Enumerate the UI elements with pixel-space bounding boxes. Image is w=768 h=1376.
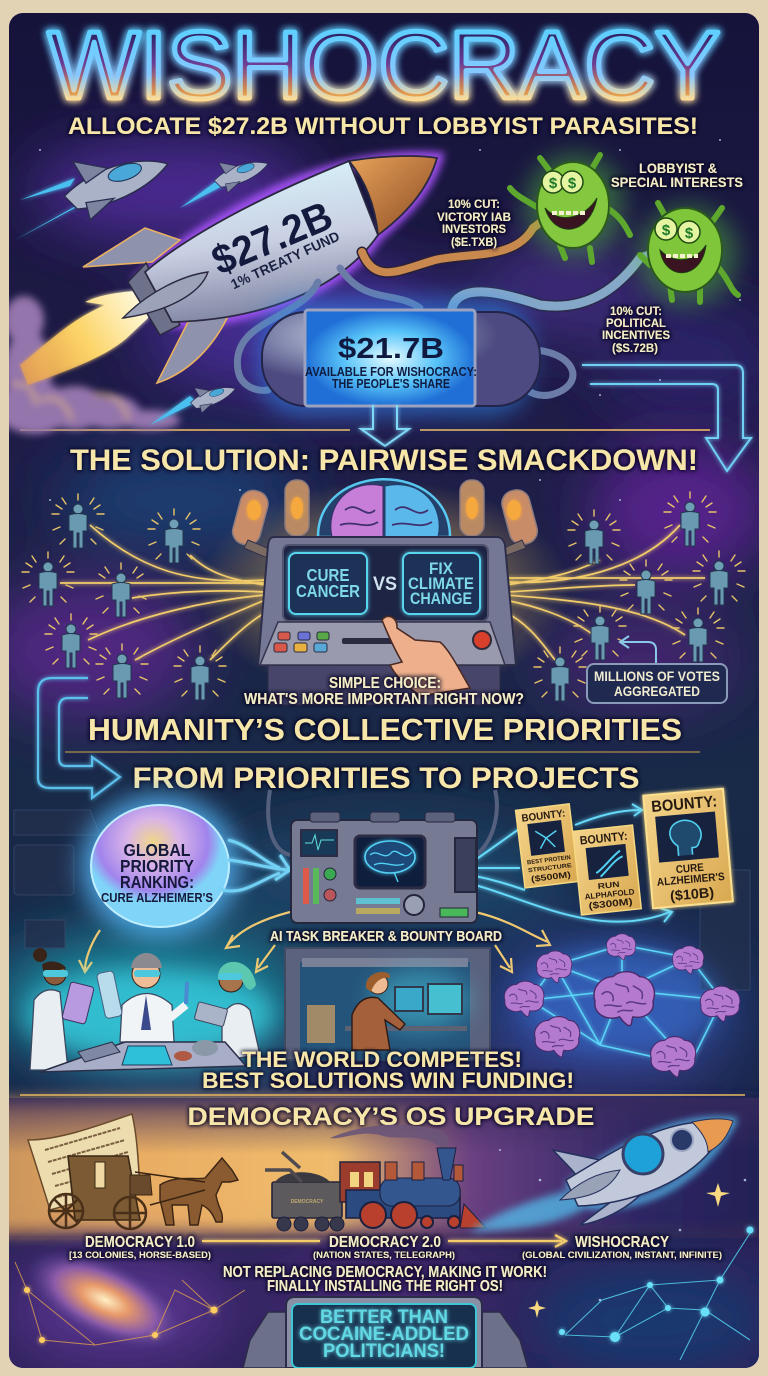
terminal text: BETTER THAN bbox=[320, 1307, 448, 1328]
carriage and scroll bbox=[28, 1114, 238, 1229]
sphere text: RANKING: bbox=[120, 872, 194, 892]
callout: millions of votes bbox=[587, 636, 727, 703]
arrow: down from tank bbox=[361, 405, 409, 446]
eyes bbox=[655, 218, 677, 240]
person at desk bbox=[352, 972, 405, 1050]
ship trails bbox=[15, 175, 230, 425]
label: lobbyist: LOBBYIST & bbox=[639, 160, 717, 176]
dividers bbox=[20, 430, 745, 1095]
AI task machine bbox=[268, 790, 497, 923]
background machinery bbox=[14, 810, 750, 990]
bounty poster: cure alzheimer's: ALZHEIMER'S bbox=[656, 871, 725, 889]
heading: OS upgrade: DEMOCRACY’S OS UPGRADE bbox=[188, 1103, 594, 1131]
label: victory lab cut: 10% CUT: bbox=[448, 199, 500, 211]
flame bbox=[20, 290, 150, 385]
feed pipes bbox=[237, 268, 420, 390]
coder workspace bbox=[285, 948, 490, 1060]
tank label line 2: THE PEOPLE'S SHARE bbox=[332, 377, 450, 391]
return pipe bbox=[515, 350, 573, 395]
caption: simple choice bbox=[244, 675, 524, 708]
heading: solution: THE SOLUTION: PAIRWISE SMACKDOWN! bbox=[70, 444, 698, 477]
label: lobbyist bbox=[611, 160, 743, 190]
steam train bbox=[265, 1125, 486, 1231]
scientist right bbox=[194, 962, 260, 1060]
scientists and lab bbox=[25, 948, 275, 1072]
versus: VS bbox=[373, 574, 397, 595]
heading: collective priorities: HUMANITY’S COLLECTIVE PRIORITIES bbox=[88, 712, 682, 747]
galaxy bbox=[12, 1230, 245, 1370]
panel: fix climate change: CLIMATE bbox=[408, 575, 474, 593]
wishocracy bbox=[522, 1234, 722, 1261]
interior glow bbox=[370, 970, 470, 1030]
machine base bbox=[268, 665, 500, 705]
cab bbox=[340, 1162, 380, 1202]
democracy 1.0: DEMOCRACY 1.0 bbox=[85, 1234, 195, 1251]
tank label: AVAILABLE FOR WISHOCRACY: bbox=[305, 365, 477, 379]
timeline arrow bbox=[202, 1235, 566, 1247]
body bbox=[648, 208, 722, 292]
wishocracy: (GLOBAL CIVILIZATION, INSTANT, INFINITE) bbox=[522, 1250, 722, 1261]
scroll writing bbox=[45, 1128, 130, 1197]
sphere text: PRIORITY bbox=[120, 856, 194, 876]
terminal text: COCAINE-ADDLED bbox=[299, 1324, 469, 1345]
eyes bbox=[542, 171, 564, 193]
sky shading bbox=[0, 1098, 768, 1238]
slider bbox=[342, 638, 404, 644]
voting machine bbox=[230, 479, 540, 705]
callout: millions of votes: AGGREGATED bbox=[614, 684, 700, 699]
boxes bbox=[307, 1005, 335, 1043]
label: political cut: ($S.72B) bbox=[612, 343, 658, 355]
fins bbox=[553, 1150, 640, 1225]
tank glow bbox=[260, 300, 530, 415]
blue constellation bbox=[528, 1183, 754, 1360]
vote lines bbox=[60, 480, 705, 700]
democracy 2.0: (NATION STATES, TELEGRAPH) bbox=[313, 1250, 455, 1261]
glowing vote lines bbox=[60, 525, 705, 660]
alien glow bbox=[525, 153, 625, 257]
brain porthole bbox=[623, 1134, 663, 1174]
dusk to space sky bbox=[0, 1100, 768, 1240]
copper pipe to lobbyist bbox=[362, 214, 552, 272]
rocket side fin bbox=[123, 272, 208, 318]
nose bbox=[692, 1119, 733, 1152]
alien: lobbyist bbox=[510, 153, 630, 262]
network lines bbox=[530, 945, 722, 1065]
terminal screen bbox=[292, 1304, 476, 1368]
side slot bbox=[455, 838, 476, 892]
small porthole bbox=[671, 1129, 693, 1151]
heading: world competes bbox=[202, 1047, 574, 1093]
bounty poster: protein: ($500M) bbox=[530, 869, 572, 884]
bounty poster: protein bbox=[516, 804, 579, 888]
terminal text bbox=[299, 1307, 469, 1362]
lab table bbox=[40, 1042, 246, 1072]
sphere text bbox=[101, 840, 213, 905]
scientist center bbox=[96, 953, 187, 1042]
side modules bbox=[243, 1312, 528, 1368]
antennae and limbs bbox=[510, 155, 630, 262]
conclusion bbox=[223, 1264, 547, 1295]
title: WISHOCRACY bbox=[48, 12, 720, 119]
illustration: smoke and flame bbox=[0, 290, 180, 434]
small monitor bbox=[301, 830, 337, 856]
brain dome bbox=[318, 479, 450, 537]
rocket fins bbox=[83, 228, 230, 383]
scroll bbox=[28, 1114, 140, 1210]
machine side arms bbox=[244, 540, 526, 560]
tank ends bbox=[262, 312, 540, 406]
caption: simple choice: SIMPLE CHOICE: bbox=[329, 675, 441, 692]
control deck bbox=[260, 622, 505, 665]
wishocracy: WISHOCRACY bbox=[575, 1234, 670, 1251]
background nebula: voting section bbox=[0, 440, 768, 720]
democracy 1.0: [13 COLONIES, HORSE-BASED) bbox=[69, 1250, 211, 1261]
democracy 2.0 bbox=[313, 1234, 455, 1261]
sphere text: GLOBAL bbox=[124, 840, 191, 860]
machine cabinet bbox=[258, 537, 516, 665]
bounty poster: cure alzheimer's: BOUNTY: bbox=[651, 793, 718, 816]
arrow: to projects bbox=[38, 678, 120, 798]
antennae and limbs bbox=[640, 203, 738, 302]
lab equipment bbox=[78, 1040, 218, 1065]
democracy 1.0 bbox=[69, 1234, 211, 1261]
carriage bbox=[68, 1156, 140, 1220]
machine gold glow bbox=[199, 480, 569, 700]
rocket engine bbox=[128, 263, 180, 335]
gold constellation bbox=[15, 1262, 245, 1345]
rocket purple glow bbox=[140, 157, 437, 322]
heading: priorities to projects: FROM PRIORITIES TO PROJECTS bbox=[132, 762, 640, 795]
label: political cut bbox=[602, 306, 670, 355]
sphere text: CURE ALZHEIMER'S bbox=[101, 890, 213, 905]
vacuum tubes bbox=[230, 480, 540, 548]
horse bbox=[160, 1158, 238, 1225]
voters bbox=[22, 492, 745, 701]
rocket bbox=[83, 156, 437, 383]
tank bbox=[260, 300, 540, 415]
rocket label: 1% TREATY FUND bbox=[228, 228, 342, 292]
bounty poster: alphafold bbox=[573, 825, 641, 915]
label: AI task breaker: AI TASK BREAKER & BOUNTY BOARD bbox=[270, 928, 502, 945]
panel: fix climate change: CHANGE bbox=[410, 590, 472, 608]
monitors bbox=[395, 984, 462, 1014]
heading: world competes: BEST SOLUTIONS WIN FUNDING! bbox=[202, 1068, 574, 1093]
hand bbox=[382, 616, 470, 696]
brain network bbox=[504, 934, 740, 1077]
colored buttons bbox=[274, 632, 329, 652]
panel: fix climate change: FIX bbox=[429, 560, 453, 578]
bounty poster: protein: STRUCTURE bbox=[528, 863, 572, 874]
labels: cuts bbox=[437, 160, 743, 355]
scientist left bbox=[30, 948, 94, 1070]
background: projects section bbox=[0, 820, 740, 1101]
arrows: beams to bounties bbox=[475, 804, 672, 922]
subtitle: ALLOCATE $27.2B WITHOUT LOBBYIST PARASITES! bbox=[68, 113, 698, 140]
mouth bbox=[545, 198, 597, 229]
tube filaments bbox=[247, 497, 521, 520]
brain nodes bbox=[504, 934, 740, 1077]
cosmic ground bbox=[0, 1240, 768, 1376]
heading: world competes: THE WORLD COMPETES! bbox=[242, 1047, 522, 1072]
eye dollars: $ bbox=[662, 222, 671, 239]
panel: cure cancer: CANCER bbox=[296, 581, 360, 601]
conclusion: NOT REPLACING DEMOCRACY, MAKING IT WORK! bbox=[223, 1264, 547, 1281]
main monitor with brain bbox=[355, 836, 425, 888]
tank window bbox=[305, 310, 475, 406]
label: victory lab cut: ($E.TXB) bbox=[451, 237, 497, 249]
wheels bbox=[49, 1194, 146, 1229]
label: lobbyist: SPECIAL INTERESTS bbox=[611, 174, 743, 190]
bounty poster: alphafold: BOUNTY: bbox=[579, 829, 628, 848]
cowcatcher bbox=[460, 1204, 486, 1228]
boiler bbox=[346, 1190, 460, 1218]
wires bbox=[268, 790, 497, 855]
bounty poster: alphafold: ALPHAFOLD bbox=[584, 887, 635, 901]
wheels bbox=[360, 1202, 460, 1228]
upgrade rocket bbox=[470, 1119, 733, 1232]
stack and domes bbox=[437, 1148, 456, 1180]
panel: cure cancer: CURE bbox=[306, 565, 350, 585]
machine screen bbox=[283, 545, 488, 621]
rocket amount: $27.2B bbox=[205, 192, 339, 284]
bounty poster: cure alzheimer's bbox=[643, 789, 733, 908]
arrows: gold flows bbox=[79, 912, 550, 972]
shutter bbox=[302, 958, 468, 967]
room interior bbox=[300, 962, 470, 1060]
room frame bbox=[285, 948, 490, 1060]
smoke cloud bbox=[0, 296, 180, 434]
democracy 2.0: DEMOCRACY 2.0 bbox=[329, 1234, 441, 1251]
callout: millions of votes: MILLIONS OF VOTES bbox=[594, 669, 720, 684]
bounty poster: cure alzheimer's: ($10B) bbox=[669, 884, 715, 904]
crane bbox=[265, 1152, 302, 1182]
red button bbox=[473, 631, 491, 649]
lower controls bbox=[356, 895, 468, 917]
lab glow bbox=[25, 970, 275, 1060]
bounty poster: protein: BEST PROTEIN bbox=[527, 855, 571, 866]
alien: lobbyist: $ bbox=[568, 175, 577, 192]
priority sphere bbox=[80, 794, 240, 938]
label: political cut: INCENTIVES bbox=[602, 330, 670, 342]
terminal frame bbox=[286, 1297, 482, 1368]
eye dollars: $ bbox=[549, 175, 558, 192]
steam train: DEMOCRACY bbox=[291, 1199, 324, 1205]
top pods bbox=[310, 812, 455, 822]
panel: cure cancer bbox=[289, 553, 367, 614]
sphere bbox=[91, 805, 229, 927]
cabinet bbox=[291, 820, 477, 923]
background nebula: top section bbox=[30, 140, 768, 420]
pipes bbox=[237, 214, 660, 395]
conclusion: FINALLY INSTALLING THE RIGHT OS! bbox=[267, 1278, 503, 1295]
bounty poster: alphafold: RUN bbox=[597, 880, 620, 891]
sphere glow bbox=[80, 794, 240, 938]
label: victory lab cut: VICTORY IAB bbox=[437, 212, 511, 224]
sparkles bbox=[528, 1183, 730, 1318]
coal bbox=[275, 1172, 330, 1182]
bounty poster: protein: BOUNTY: bbox=[521, 807, 566, 825]
body bbox=[566, 1122, 718, 1206]
body bbox=[537, 162, 609, 248]
arrows: sphere to machine bbox=[222, 840, 290, 891]
label: victory lab cut bbox=[437, 199, 511, 249]
rocket body bbox=[145, 161, 378, 322]
terminal bbox=[243, 1297, 528, 1368]
alien: politician: $ bbox=[685, 225, 694, 242]
tank amount: $21.7B bbox=[338, 333, 444, 365]
harness bbox=[135, 1172, 205, 1205]
timeline labels bbox=[69, 1234, 722, 1295]
label: political cut: 10% CUT: bbox=[610, 306, 662, 318]
caption: simple choice: WHAT'S MORE IMPORTANT RIGHT NOW? bbox=[244, 691, 524, 708]
label: political cut: POLITICAL bbox=[606, 318, 666, 330]
arrow: right flow bbox=[582, 365, 751, 471]
rocket nose bbox=[349, 156, 437, 235]
tender bbox=[272, 1182, 342, 1218]
panel: fix climate change bbox=[403, 553, 480, 614]
alien: politician bbox=[638, 203, 738, 305]
stars bbox=[39, 139, 746, 1301]
bounty poster: cure alzheimer's: CURE bbox=[675, 862, 704, 876]
network glow bbox=[520, 945, 720, 1055]
glass pipe to politician bbox=[452, 252, 660, 308]
side fin bbox=[560, 1170, 620, 1200]
terminal text: POLITICIANS! bbox=[323, 1341, 445, 1362]
label: victory lab cut: INVESTORS bbox=[442, 224, 506, 236]
gauges bbox=[303, 868, 336, 904]
rocket glow bbox=[570, 1120, 733, 1205]
smoke bbox=[330, 1125, 448, 1150]
rocket trail bbox=[470, 1190, 590, 1232]
mouth bbox=[660, 245, 706, 273]
bounty poster: alphafold: ($300M) bbox=[588, 897, 633, 912]
small spaceships bbox=[15, 160, 268, 425]
alien glow bbox=[638, 205, 738, 305]
desk bbox=[345, 1026, 467, 1031]
